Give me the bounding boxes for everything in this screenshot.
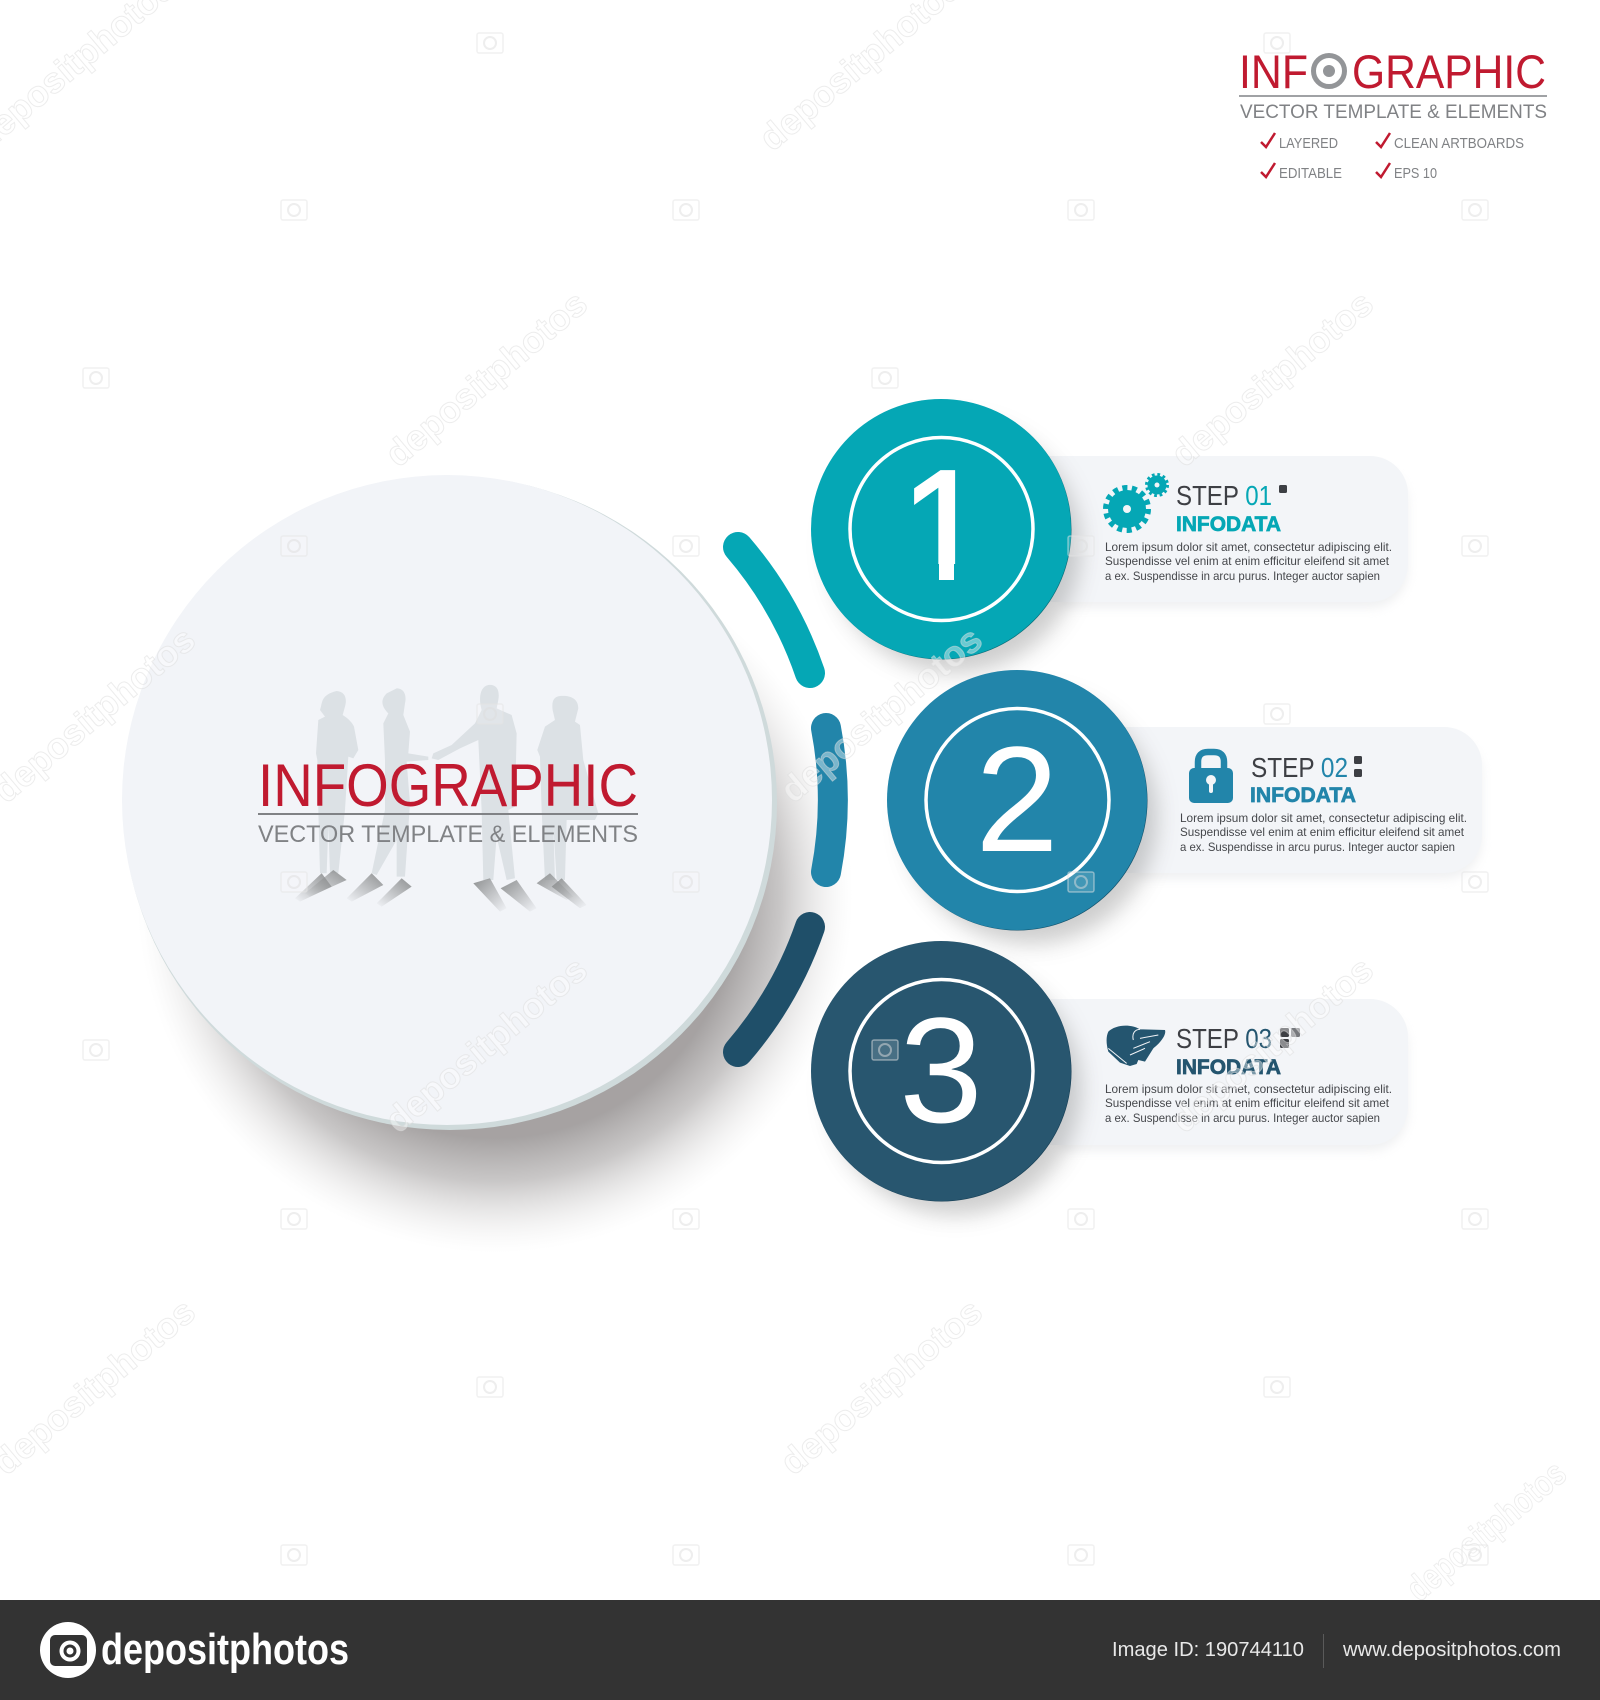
dot markers [1280, 1028, 1300, 1048]
center title: VECTOR TEMPLATE & ELEMENTS [258, 821, 638, 848]
arc connector: step 2 [826, 728, 833, 872]
step label: STEP 02 [1251, 752, 1348, 783]
logo block: top right: INF [1239, 45, 1308, 98]
checklist: CLEAN ARTBOARDS [1394, 135, 1524, 152]
heading: infodata: INFODATA [1176, 1056, 1281, 1079]
watermark overlay: depositphotos [1163, 948, 1381, 1140]
body text: Lorem ipsum dolor sit amet, consectetur adipiscing elit. [1105, 540, 1392, 554]
dot markers [1354, 756, 1362, 777]
number 1: 1 [901, 439, 987, 613]
footer brand name: depositphotos [101, 1625, 349, 1674]
icon: gears [1106, 474, 1168, 530]
body text: Suspendisse vel enim at enim efficitur eleifend sit amet [1105, 1096, 1390, 1110]
arc connector: step 1 [738, 547, 810, 673]
icon: padlock [1189, 752, 1233, 803]
heading: infodata: INFODATA [1176, 513, 1281, 536]
step label: STEP 01 [1176, 480, 1272, 511]
body text [1105, 1082, 1392, 1125]
checklist [1261, 133, 1524, 182]
body text: a ex. Suspendisse in arcu purus. Integer auctor sapien [1180, 840, 1455, 854]
center title [258, 752, 638, 848]
panel: step 1 [811, 399, 1408, 673]
image id: Image ID: 190744110 [1112, 1639, 1304, 1661]
footer bar [0, 1600, 1600, 1700]
dot marker [1279, 485, 1287, 493]
watermark overlay: depositphotos [772, 1290, 990, 1482]
arc connector: step 3 [738, 927, 810, 1052]
watermark overlay: depositphotos [772, 618, 990, 810]
logo block: top right [1239, 45, 1547, 182]
website: www.depositphotos.com [1342, 1639, 1561, 1661]
body text: Suspendisse vel enim at enim efficitur eleifend sit amet [1105, 554, 1390, 568]
main circle panel [122, 475, 853, 1253]
icon: handshake [1107, 1026, 1165, 1066]
step label: STEP 03 [1176, 1023, 1272, 1054]
body text [1180, 811, 1467, 854]
icon: camera logo [40, 1622, 96, 1678]
panel: step 2 [887, 670, 1482, 944]
body text: Lorem ipsum dolor sit amet, consectetur adipiscing elit. [1105, 1082, 1392, 1096]
checklist: EDITABLE [1279, 165, 1342, 182]
watermark overlay: depositphotos [377, 282, 595, 474]
logo block: top right: GRAPHIC [1352, 45, 1546, 98]
icon: target [1314, 56, 1344, 86]
silhouettes: business people [295, 685, 598, 912]
body text: a ex. Suspendisse in arcu purus. Integer auctor sapien [1105, 569, 1380, 583]
body text [1105, 540, 1392, 583]
number 3: 3 [899, 986, 983, 1154]
checklist: LAYERED [1279, 135, 1338, 152]
panel: step 3 [811, 941, 1408, 1215]
checklist: EPS 10 [1394, 165, 1437, 182]
center title: INFOGRAPHIC [258, 752, 638, 819]
body text: Suspendisse vel enim at enim efficitur eleifend sit amet [1180, 825, 1465, 839]
logo block: top right: VECTOR TEMPLATE & ELEMENTS [1240, 102, 1547, 123]
body text: a ex. Suspendisse in arcu purus. Integer auctor sapien [1105, 1111, 1380, 1125]
watermark overlay: depositphotos [1163, 282, 1381, 474]
body text: Lorem ipsum dolor sit amet, consectetur adipiscing elit. [1180, 811, 1467, 825]
heading: infodata: INFODATA [1250, 784, 1356, 807]
number 2: 2 [975, 715, 1059, 883]
watermark overlay: depositphotos [377, 948, 595, 1140]
